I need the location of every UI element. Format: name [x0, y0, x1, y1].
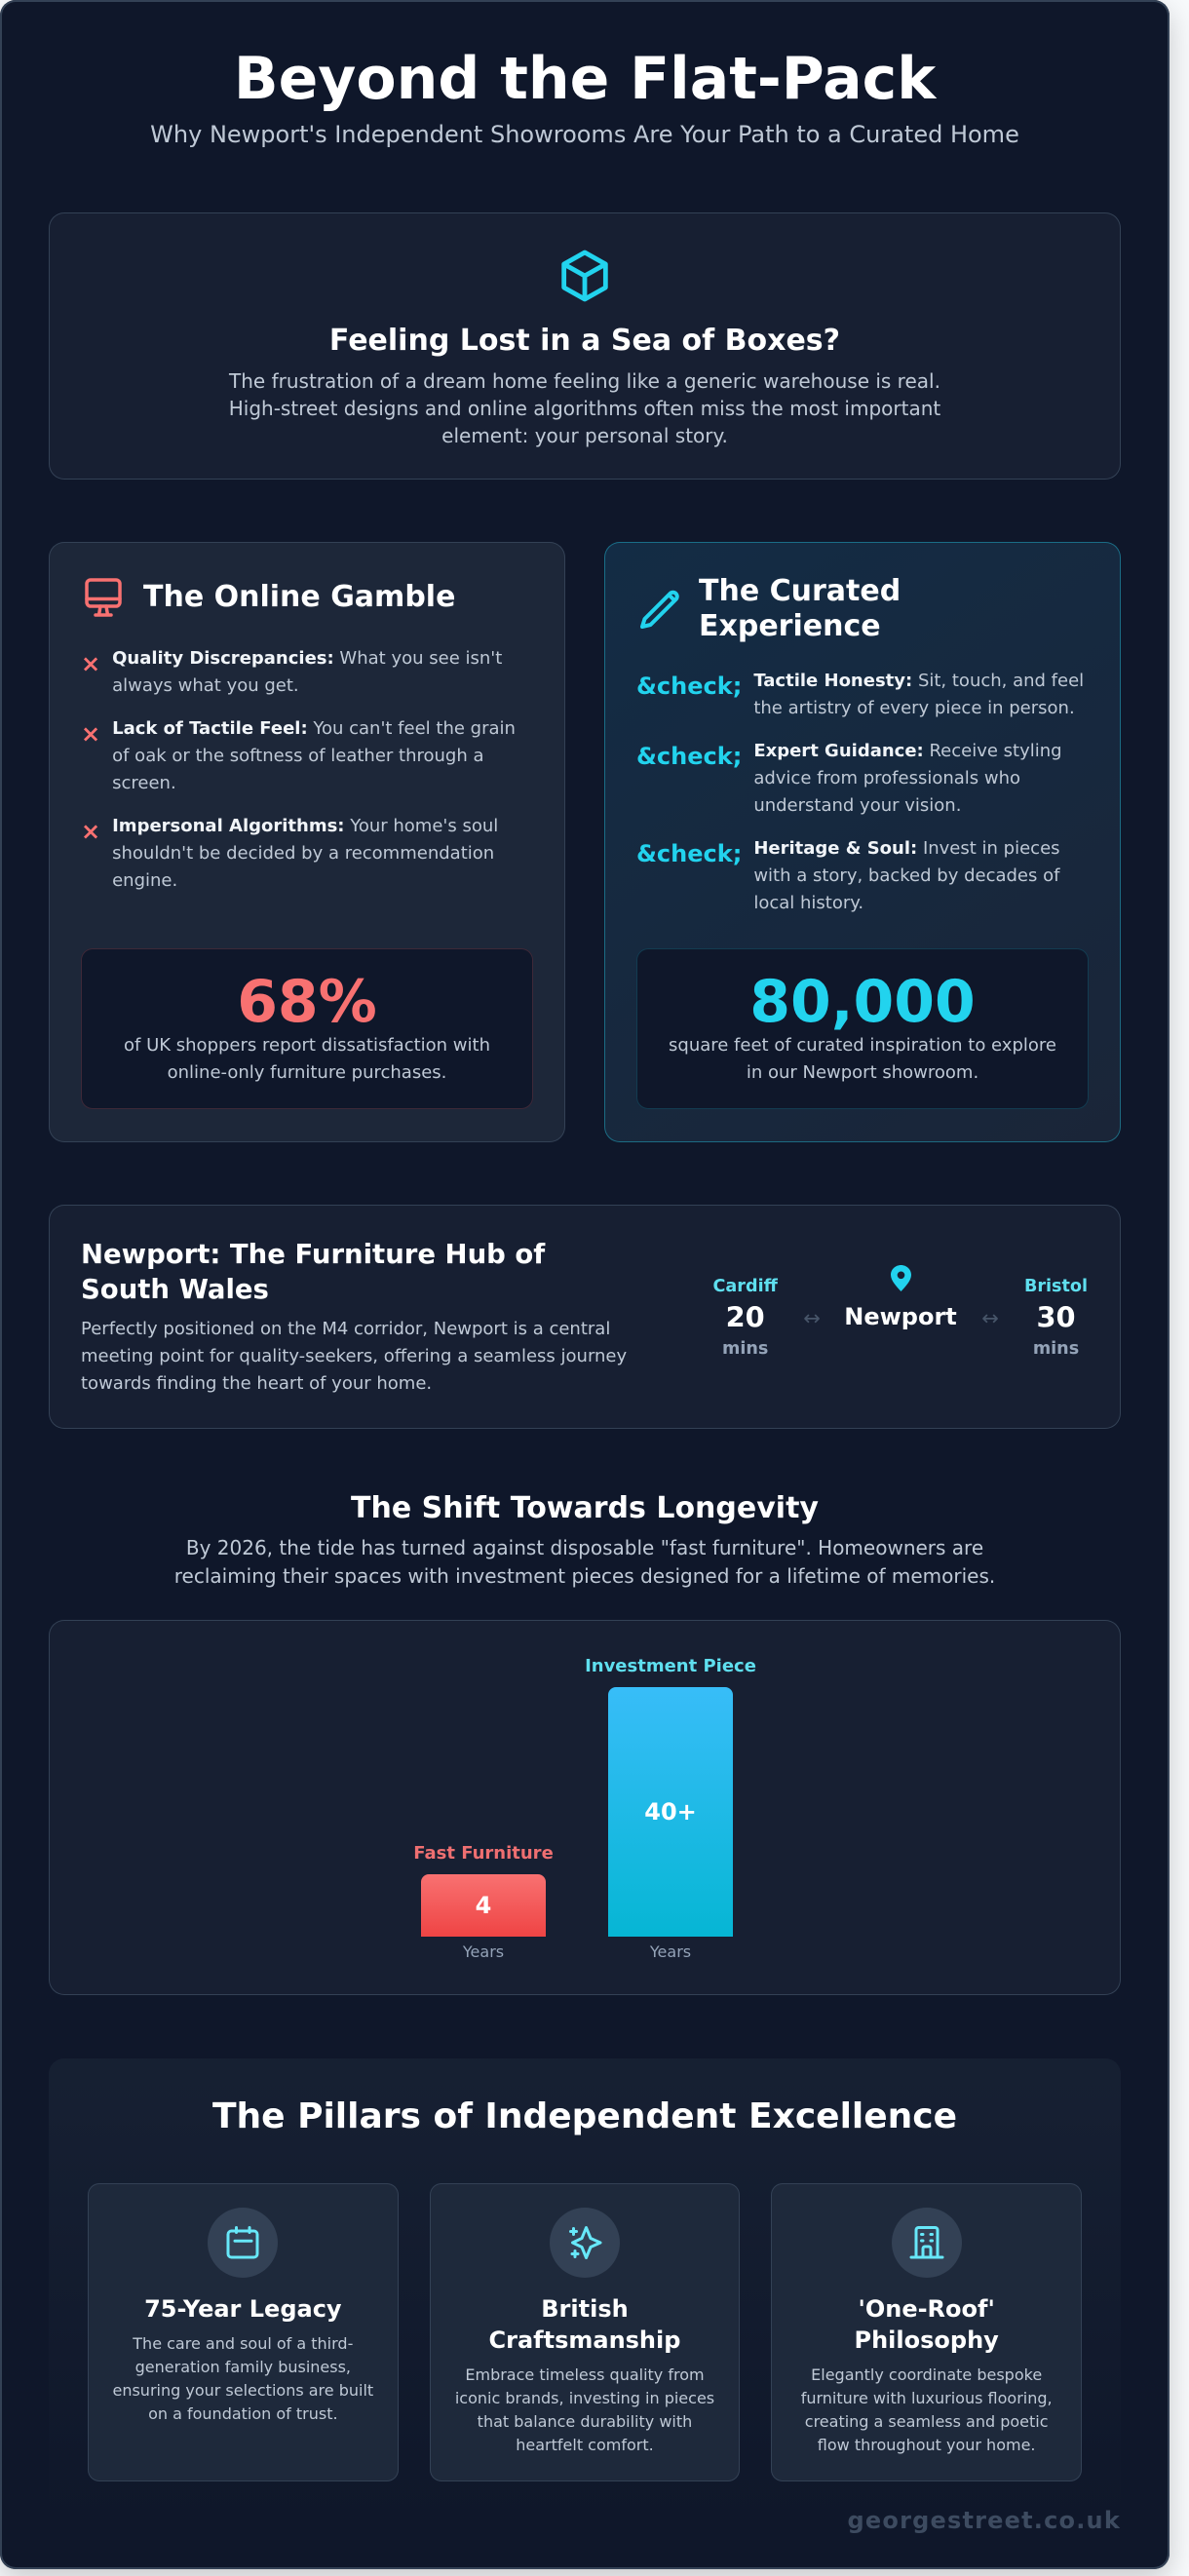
icon: building — [892, 2208, 962, 2278]
card title: Philosophy — [854, 2326, 999, 2354]
text: frustration paragraph — [228, 368, 940, 447]
heading: newport furniture hub: South Wales — [81, 1273, 269, 1304]
list: online problems: × — [81, 649, 100, 676]
icon: map pin — [891, 1265, 911, 1291]
card text: creating a seamless and poetic — [805, 2412, 1049, 2431]
panel: the online gamble — [49, 542, 565, 1142]
panel: the curated experience — [604, 542, 1121, 1142]
list: curated benefits: &check; — [636, 840, 742, 867]
list: curated benefits: local history. — [753, 893, 863, 913]
list: online problems: Impersonal Algorithms: Your home's soul — [112, 815, 498, 836]
list: online problems: × — [81, 719, 100, 747]
Cardiff label: Cardiff — [713, 1277, 778, 1296]
arrow: Cardiff to Newport: ↔ — [803, 1306, 821, 1329]
card text: flow throughout your home. — [818, 2436, 1035, 2454]
Bristol minutes: 30 — [1036, 1300, 1076, 1333]
stat caption: square feet of curated inspiration to explore — [669, 1035, 1056, 1056]
heading: the curated experience — [699, 574, 901, 643]
list: curated benefits: Tactile Honesty: Sit, touch, and feel — [753, 671, 1084, 691]
icon: desktop monitor — [85, 578, 122, 617]
card title: 'One-Roof' — [858, 2295, 995, 2323]
list: curated benefits: understand your vision. — [753, 795, 961, 816]
Cardiff minutes: 20 — [726, 1300, 765, 1333]
card text: that balance durability with — [478, 2412, 692, 2431]
icon: calendar — [208, 2208, 278, 2278]
axis label: years: Years — [463, 1942, 504, 1961]
list: curated benefits: with a story, backed by decades of — [753, 865, 1059, 886]
card text — [112, 2334, 373, 2423]
card text: heartfelt comfort. — [516, 2436, 654, 2454]
list: online problems: of oak or the softness of leather through a — [112, 745, 484, 766]
stat caption: of UK shoppers report dissatisfaction with — [124, 1035, 490, 1056]
text: newport paragraph: towards finding the heart of your home. — [81, 1373, 432, 1394]
card: one-roof philosophy — [771, 2183, 1082, 2481]
panel: newport hub — [49, 1205, 1121, 1429]
list: curated benefits: advice from professionals who — [753, 768, 1020, 788]
card: british craftsmanship — [430, 2183, 740, 2481]
footer: website: georgestreet.co.uk — [848, 2507, 1121, 2534]
subtitle: Why Newport's Independent Showrooms Are Your Path to a Curated Home — [150, 121, 1019, 148]
text: longevity paragraph — [174, 1536, 995, 1588]
title: Beyond the Flat-Pack — [234, 45, 936, 113]
bar value: 4 — [476, 1892, 491, 1919]
list: curated benefits: the artistry of every piece in person. — [753, 698, 1075, 718]
list: online problems: × — [81, 817, 100, 844]
list: online problems: always what you get. — [112, 674, 299, 696]
text: newport paragraph: Perfectly positioned on the M4 corridor, Newport is a central — [81, 1319, 610, 1339]
card title: 75-Year Legacy — [144, 2295, 342, 2323]
list: curated benefits — [636, 671, 1084, 913]
card text: The care and soul of a third- — [133, 2334, 353, 2353]
arrow: Newport to Bristol: ↔ — [981, 1306, 999, 1329]
list: online problems — [81, 647, 516, 891]
card text: iconic brands, investing in pieces — [455, 2389, 714, 2407]
card text: on a foundation of trust. — [148, 2404, 338, 2423]
label: fast furniture: Fast Furniture — [413, 1843, 554, 1864]
text: frustration paragraph: The frustration of a dream home feeling like a generic warehouse is real. — [229, 368, 940, 392]
stat caption: in our Newport showroom. — [747, 1062, 978, 1083]
stat caption — [669, 1035, 1056, 1083]
card text: ensuring your selections are built — [112, 2381, 373, 2400]
bar: fast furniture 4 years — [421, 1874, 546, 1937]
list: online problems: shouldn't be decided by a recommendation — [112, 842, 494, 864]
text: longevity paragraph: By 2026, the tide has turned against disposable "fast furniture". Homeowners are — [186, 1536, 983, 1559]
bar value: 40+ — [644, 1797, 697, 1825]
card: 75-year legacy — [88, 2183, 399, 2481]
text: longevity paragraph: reclaiming their spaces with investment pieces designed for a lifetime of memories. — [174, 1564, 995, 1588]
list: curated benefits: Expert Guidance: Receive styling — [753, 741, 1062, 761]
icon: pencil — [640, 591, 679, 629]
heading: the shift towards longevity: The Shift Towards Longevity — [351, 1491, 819, 1525]
heading: the curated experience: The Curated — [699, 574, 901, 608]
card text: generation family business, — [135, 2358, 351, 2376]
bar: investment piece 40+ years — [608, 1687, 733, 1937]
icon: box — [561, 250, 608, 302]
list: online problems: screen. — [112, 772, 176, 793]
axis label: years: Years — [650, 1942, 691, 1961]
Newport label: Newport — [844, 1302, 957, 1329]
stat number: 80,000 — [749, 968, 976, 1036]
list: online problems: engine. — [112, 869, 177, 891]
label: investment piece: Investment Piece — [585, 1656, 756, 1676]
card title: Craftsmanship — [489, 2326, 680, 2354]
text: newport paragraph — [81, 1319, 627, 1394]
heading: newport furniture hub: Newport: The Furniture Hub of — [81, 1239, 545, 1270]
text: frustration paragraph: element: your personal story. — [441, 424, 728, 447]
text: newport paragraph: meeting point for quality-seekers, offering a seamless journey — [81, 1346, 627, 1366]
icon: sparkles — [550, 2208, 620, 2278]
list: curated benefits: &check; — [636, 673, 742, 700]
heading: the curated experience: Experience — [699, 609, 881, 643]
stat: 80,000 square feet — [636, 948, 1089, 1109]
heading: feeling lost: Feeling Lost in a Sea of Boxes? — [329, 324, 840, 357]
Bristol unit: mins — [1033, 1339, 1079, 1359]
list: online problems: Quality Discrepancies: What you see isn't — [112, 647, 502, 669]
card title — [489, 2295, 680, 2354]
heading: newport furniture hub — [81, 1239, 546, 1304]
stat caption — [124, 1035, 490, 1083]
Cardiff unit: mins — [722, 1339, 768, 1359]
card title: British — [541, 2295, 629, 2323]
panel: feeling lost hero — [49, 212, 1121, 480]
card text: furniture with luxurious flooring, — [801, 2389, 1053, 2407]
list: curated benefits: Heritage & Soul: Invest in pieces — [753, 838, 1060, 859]
heading: the online gamble: The Online Gamble — [143, 579, 455, 614]
heading: pillars: The Pillars of Independent Excellence — [212, 2096, 957, 2136]
travel time diagram — [713, 1265, 1088, 1359]
Bristol label: Bristol — [1024, 1277, 1088, 1296]
panel: lifespan bar chart — [49, 1620, 1121, 1995]
card title — [854, 2295, 999, 2354]
panel: pillars of excellence — [49, 2058, 1121, 2520]
stat caption: online-only furniture purchases. — [168, 1062, 446, 1083]
card text — [455, 2365, 714, 2454]
stat: 68 percent — [81, 948, 533, 1109]
list: online problems: Lack of Tactile Feel: You can't feel the grain — [112, 717, 516, 739]
stat number: 68% — [237, 968, 377, 1036]
list: curated benefits: &check; — [636, 743, 742, 770]
card text — [801, 2365, 1053, 2454]
text: frustration paragraph: High-street designs and online algorithms often miss the most important — [229, 397, 940, 420]
card text: Embrace timeless quality from — [465, 2365, 705, 2384]
card text: Elegantly coordinate bespoke — [811, 2365, 1042, 2384]
